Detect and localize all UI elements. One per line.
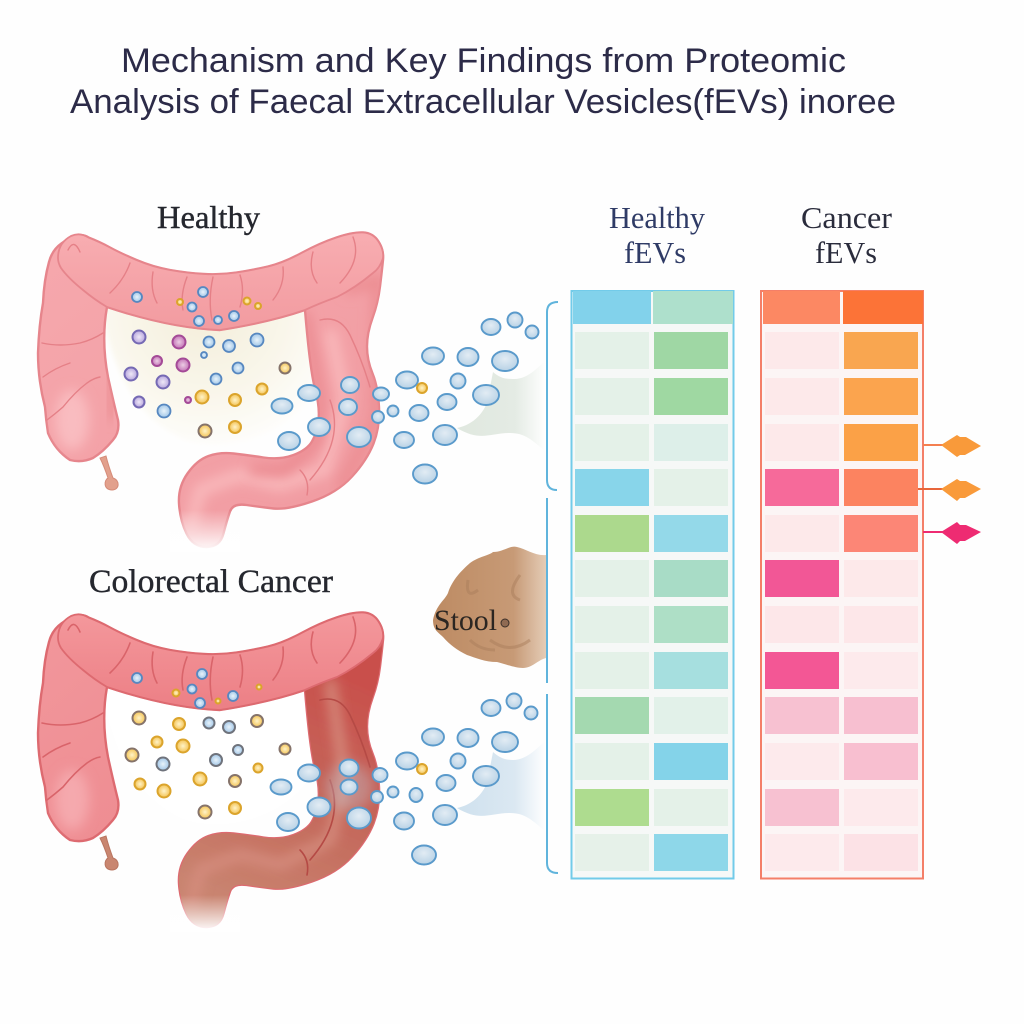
illustration: cancer colon <box>38 612 398 940</box>
heading: Colorectal Cancer: Colorectal Cancer <box>89 564 333 600</box>
lumen background <box>100 296 314 444</box>
healthy vesicle stream <box>457 360 546 452</box>
cancer colon structure <box>38 612 392 940</box>
heat map cells <box>575 332 728 871</box>
column headers <box>573 291 733 324</box>
title: Mechanism and Key Findings from Proteomic <box>121 42 846 80</box>
heading: Cancer fEVs: Cancer <box>801 200 893 235</box>
colon shading <box>55 280 378 530</box>
panel frame <box>761 291 923 878</box>
vesicles leaving the colon <box>270 760 398 831</box>
column headers <box>763 291 923 324</box>
heading: Healthy fEVs: Healthy <box>609 201 706 235</box>
panel: cancer fEVs heat map <box>761 291 923 878</box>
bracket: upper <box>547 302 558 490</box>
heading: Healthy fEVs: fEVs <box>624 236 686 270</box>
arrow: pink marker <box>923 522 981 544</box>
panel: healthy fEVs heat map <box>572 291 734 878</box>
stool label: Stool <box>434 605 497 637</box>
particles in the lumen <box>124 287 290 438</box>
particles in the lumen <box>126 669 290 818</box>
small vesicle on stool <box>501 619 509 627</box>
bracket: middle <box>546 498 548 683</box>
heading: Cancer fEVs: fEVs <box>815 235 877 270</box>
panel frame <box>572 291 734 878</box>
transverse colon <box>58 232 383 330</box>
heading: Healthy colon: Healthy <box>157 199 260 235</box>
heat map cells <box>765 332 918 871</box>
illustration: healthy colon <box>38 232 398 552</box>
arrow: orange marker 2 <box>918 479 981 501</box>
arrow: orange marker 1 <box>923 435 981 457</box>
title <box>70 42 896 121</box>
cancer vesicle stream <box>457 740 546 832</box>
haustra folds <box>42 237 370 495</box>
lumen background <box>100 676 314 824</box>
rectal fade <box>170 510 240 552</box>
vesicles leaving the colon <box>272 377 398 450</box>
icon: stool <box>433 547 546 668</box>
title: Analysis of Faecal Extracellular Vesicles(fEVs) inoree <box>70 83 896 121</box>
healthy vesicle cloud <box>394 312 538 484</box>
colon body <box>38 232 383 547</box>
cancer vesicle cloud <box>394 694 538 864</box>
appendix <box>100 456 118 490</box>
bracket: lower <box>547 694 558 873</box>
